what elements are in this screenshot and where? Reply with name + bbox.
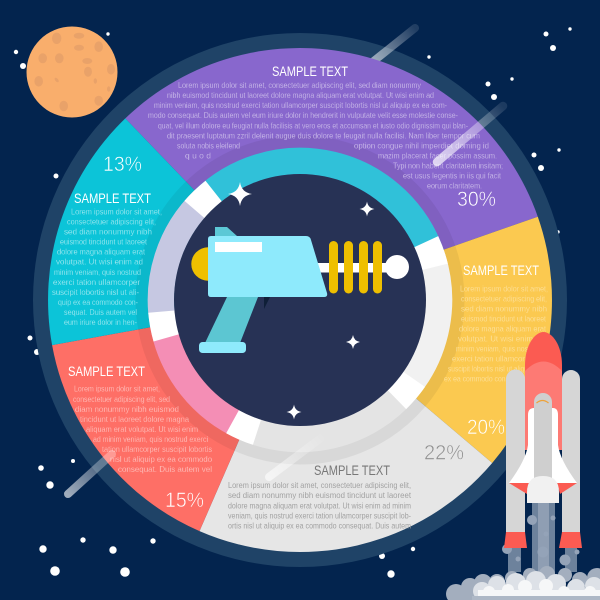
body: teal: dolore magna aliquam erat [57, 246, 146, 256]
heading: grey: SAMPLE TEXT [314, 462, 390, 478]
orbiter wings and body [509, 408, 577, 483]
body: yellow: sed diam nonummy nibh [461, 304, 547, 314]
engine dome [527, 476, 559, 503]
panel: red slice 15% [52, 300, 300, 531]
body: purple: eorum claritatem. [427, 180, 482, 190]
side boosters [506, 370, 580, 536]
body: red: diam nonummy nibh euismod [75, 404, 179, 414]
text block: yellow [444, 262, 548, 439]
panel: purple slice 30% [125, 48, 538, 300]
centre dial ring [161, 161, 439, 439]
body: purple: minim veniam, quis nostrud exerci tation ullamcorper suscipit lobortis nisl ut aliquip ex ea com- [154, 100, 447, 110]
body: purple: nibh euismod tincidunt ut laoreet dolore magna aliquam erat volutpat. Ut wisi enim ad [167, 90, 434, 100]
body: red: Lorem ipsum dolor sit amet, [74, 384, 160, 394]
body: red: tation ullamcorper suscipit lobortis [102, 444, 212, 454]
body: purple: mazim placerat facer possim assum. [378, 150, 497, 160]
body: purple: q u o d [185, 150, 211, 160]
body: teal: Lorem ipsum dolor sit amet, [71, 206, 162, 216]
panel: teal slice 13% [48, 118, 300, 345]
body: purple: est usus legentis in iis qui facit [403, 170, 502, 180]
body: purple: modo consequat. Duis autem vel eum iriure dolor in hendrerit in vulputate velit esse molestie conse- [148, 110, 458, 120]
body: teal: sed diam nonummy nibh [64, 226, 152, 236]
body: yellow: Lorem ipsum dolor sit amet, [460, 284, 548, 294]
heading: teal: SAMPLE TEXT [74, 190, 151, 206]
body: grey: dolore magna aliquam erat volutpat. Ut wisi enim ad minim [228, 500, 411, 510]
body: red: nisl ut aliquip ex ea commodo [110, 454, 212, 464]
body: teal: sequat. Duis autem vel [64, 307, 137, 317]
body: purple: quat, vel illum dolore eu feugiat nulla facilisis at vero eros et accumsan et iusto odio dignissim qui blan- [158, 120, 468, 130]
inner shadow band [142, 142, 458, 458]
panel: yellow slice 20% [300, 217, 552, 463]
text block: red [68, 363, 212, 512]
body: grey: sed diam nonummy nibh euismod tincidunt ut laoreet [228, 490, 412, 500]
body: red: consequat. Duis autem vel [118, 464, 212, 474]
percent: 15%: 15% [165, 489, 204, 512]
body: yellow: minim veniam, quis nostrud [456, 344, 540, 354]
planet [26, 26, 118, 118]
heading: red: SAMPLE TEXT [68, 363, 145, 379]
body: red: consectetuer adipiscing elit, sed [73, 394, 170, 404]
exhaust [502, 503, 580, 573]
body: teal [52, 206, 162, 327]
body: teal: consectetuer adipiscing elit, [67, 216, 156, 226]
body: teal: euismod tincidunt ut laoreet [60, 236, 147, 246]
body: grey [228, 480, 412, 530]
body: grey: Lorem ipsum dolor sit amet, consectetuer adipiscing elit, [228, 480, 411, 490]
body: red: tincidunt ut laoreet dolore magna [80, 414, 189, 424]
body: red: ad minim veniam, quis nostrud exerci [93, 434, 208, 444]
body: grey: veniam, quis nostrud exerci tation ullamcorper suscipit lob- [228, 510, 411, 520]
body: yellow: suscipit lobortis nisl ut aliquip [448, 364, 533, 374]
percent: 22%: 22% [424, 442, 464, 464]
outer orbit ring [33, 33, 567, 567]
comet: bottom [269, 435, 325, 477]
body: yellow: dolore magna aliquam erat [459, 324, 547, 334]
body: teal: suscipit lobortis nisl ut ali- [52, 287, 139, 297]
heading: purple: SAMPLE TEXT [272, 63, 348, 79]
text block: teal [52, 153, 162, 327]
body: teal: eum iriure dolor in hen- [64, 317, 137, 327]
centre disc [174, 174, 426, 426]
red wing tips [509, 483, 577, 494]
body: red [73, 384, 212, 474]
orbiter spine [534, 393, 552, 480]
percent: 13%: 13% [103, 153, 142, 176]
body: yellow [444, 284, 548, 384]
body: yellow: volutpat. Ut wisi enim ad [458, 334, 544, 344]
body: yellow: exerci tation ullamcorper [452, 354, 536, 364]
smoke cloud [446, 566, 600, 600]
text block: grey [228, 442, 464, 530]
body: teal: volutpat. Ut wisi enim ad [56, 256, 143, 266]
comet: lower left [68, 454, 112, 494]
comet: upper behind wheel [370, 28, 415, 64]
body: purple: Typi non habent claritatem insitam; [393, 160, 503, 170]
body: purple [148, 80, 503, 190]
text block: purple [148, 63, 503, 211]
body: yellow: consectetuer adipiscing elit, [461, 294, 547, 304]
central tank [525, 332, 562, 450]
body: purple: soluta nobis eleifend [177, 140, 240, 150]
icon: ray gun [191, 227, 409, 353]
body: purple: option congue nihil imperdiet doming id [354, 140, 489, 150]
booster nozzles [504, 532, 582, 548]
icon: space shuttle [446, 332, 600, 600]
comet: upper right [437, 106, 503, 162]
body: red: aliquam erat volutpat. Ut wisi enim [86, 424, 198, 434]
body: teal: minim veniam, quis nostrud [54, 267, 141, 277]
heading: yellow: SAMPLE TEXT [463, 262, 539, 278]
sparkles [228, 182, 374, 420]
body: purple: dit praesent luptatum zzril delenit augue duis dolore te feugait nulla facilisi. Nam liber tempor cum [167, 130, 480, 140]
body: grey: ortis nisl ut aliquip ex ea commodo consequat. Duis autem [228, 520, 411, 530]
panel: grey slice 22% [200, 300, 492, 552]
body: purple: Lorem ipsum dolor sit amet, consectetuer adipiscing elit, sed diam nonummy [178, 80, 422, 90]
body: teal: exerci tation ullamcorper [53, 277, 140, 287]
percent: 20%: 20% [467, 416, 505, 439]
body: yellow: ex ea commodo consequat. [444, 374, 528, 384]
cockpit window [536, 400, 548, 403]
body: yellow: euismod tincidunt ut laoreet [461, 314, 546, 324]
percent: 30%: 30% [457, 188, 496, 211]
body: teal: quip ex ea commodo con- [58, 297, 138, 307]
